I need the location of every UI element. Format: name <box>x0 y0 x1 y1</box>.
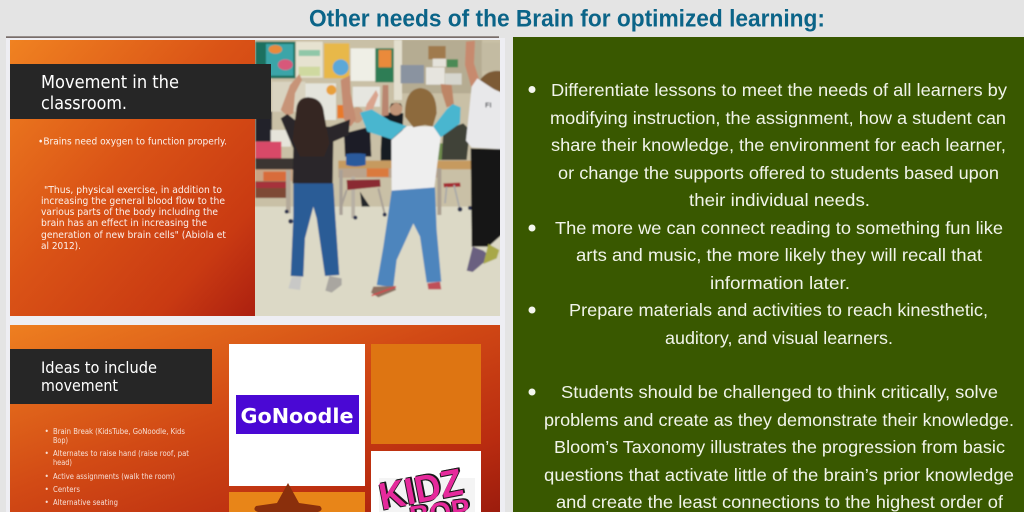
slide text: "Thus, physical exercise, in addition to <box>44 185 222 196</box>
bullet list <box>44 427 189 507</box>
bullet list: Centers <box>53 485 80 494</box>
slide heading: Movement in the <box>41 72 179 93</box>
tile: GoNoodle logo: GoNoodle <box>240 404 354 428</box>
text block: critical thinking and Bloom's Taxonomy <box>544 382 1014 512</box>
text block: connect reading to arts: information later. <box>710 273 850 293</box>
text block: critical thinking and Bloom's Taxonomy: Bloom’s Taxonomy illustrates the progression from basic <box>554 437 1005 457</box>
text block: critical thinking and Bloom's Taxonomy: and create the least connections to the highest order of <box>556 492 1003 512</box>
slide text: generation of new brain cells" (Abiola et <box>41 230 226 241</box>
figure: girl in white and teal shirt <box>360 84 461 297</box>
slide heading: classroom. <box>41 93 127 114</box>
slide heading <box>41 358 157 395</box>
slide text <box>38 136 227 252</box>
text block: learning styles: Prepare materials and activities to reach kinesthetic, <box>569 300 988 320</box>
text block: differentiate lessons <box>550 80 1007 210</box>
text block: learning styles: auditory, and visual learners. <box>665 328 893 348</box>
figure: boy jumping at right <box>465 41 503 272</box>
tile: GoNoodle logo <box>229 344 365 486</box>
text block: differentiate lessons: Differentiate lessons to meet the needs of all learners by <box>551 80 1007 100</box>
slide heading <box>41 72 179 114</box>
text block: connect reading to arts: The more we can connect reading to something fun like <box>555 218 1003 238</box>
text block: critical thinking and Bloom's Taxonomy: Students should be challenged to think critically, solve <box>561 382 998 402</box>
figure: boy jumping at right: FI <box>485 100 492 109</box>
slide heading: movement <box>41 376 118 395</box>
title bar <box>10 349 212 404</box>
slide text: al 2012). <box>41 241 81 252</box>
slide text: various parts of the body including the <box>41 207 218 218</box>
slide text: •Brains need oxygen to function properly. <box>38 136 227 148</box>
text block: critical thinking and Bloom's Taxonomy: questions that activate little of the brain’s prior knowledge <box>544 465 1014 485</box>
tile: orange with star <box>229 483 365 512</box>
title bar <box>10 64 271 119</box>
bullet list: Active assignments (walk the room) <box>53 472 175 481</box>
bullet list: • <box>44 472 49 481</box>
panel: slides backing <box>6 38 505 512</box>
tile: orange square <box>371 344 481 444</box>
text block: learning styles <box>569 300 988 348</box>
text block: differentiate lessons: their individual needs. <box>689 190 870 210</box>
bullet list: • <box>44 449 49 458</box>
photo: students jumping in classroom <box>255 40 500 316</box>
bullet list: Bop) <box>53 436 68 445</box>
tile: Kidz Bop logo <box>371 451 481 512</box>
slide text: brain has an effect in increasing the <box>41 218 207 229</box>
panel: slide movement in the classroom <box>10 35 505 321</box>
panel: green text panel <box>513 37 1024 512</box>
slide text: increasing the general blood flow to the <box>41 196 225 207</box>
panel: slide ideas to include movement <box>10 325 500 512</box>
bullet list: Alternates to raise hand (raise roof, pat <box>53 449 189 458</box>
bullet list: Brain Break (KidsTube, GoNoodle, Kids <box>53 427 185 436</box>
bullet list: head) <box>53 458 72 467</box>
slide heading: Ideas to include <box>41 358 157 377</box>
text block: differentiate lessons: or change the supports offered to students based upon <box>558 163 999 183</box>
bullet list: • <box>44 427 49 436</box>
bullet list: • <box>44 498 49 507</box>
bullet dots <box>528 86 536 396</box>
text block: differentiate lessons: share their knowledge, the environment for each learner, <box>551 135 1006 155</box>
bullet list: Alternative seating <box>53 498 118 507</box>
text block: differentiate lessons: modifying instruction, the assignment, how a student can <box>550 108 1006 128</box>
text block: critical thinking and Bloom's Taxonomy: problems and create as they demonstrate their knowledge. <box>544 410 1014 430</box>
figure: girl in black shirt <box>281 74 356 293</box>
title: Other needs of the Brain for optimized learning: <box>309 6 825 32</box>
bullet list: • <box>44 485 49 494</box>
text block: connect reading to arts <box>555 218 1003 293</box>
text block: connect reading to arts: arts and music, the more likely they will recall that <box>576 245 982 265</box>
